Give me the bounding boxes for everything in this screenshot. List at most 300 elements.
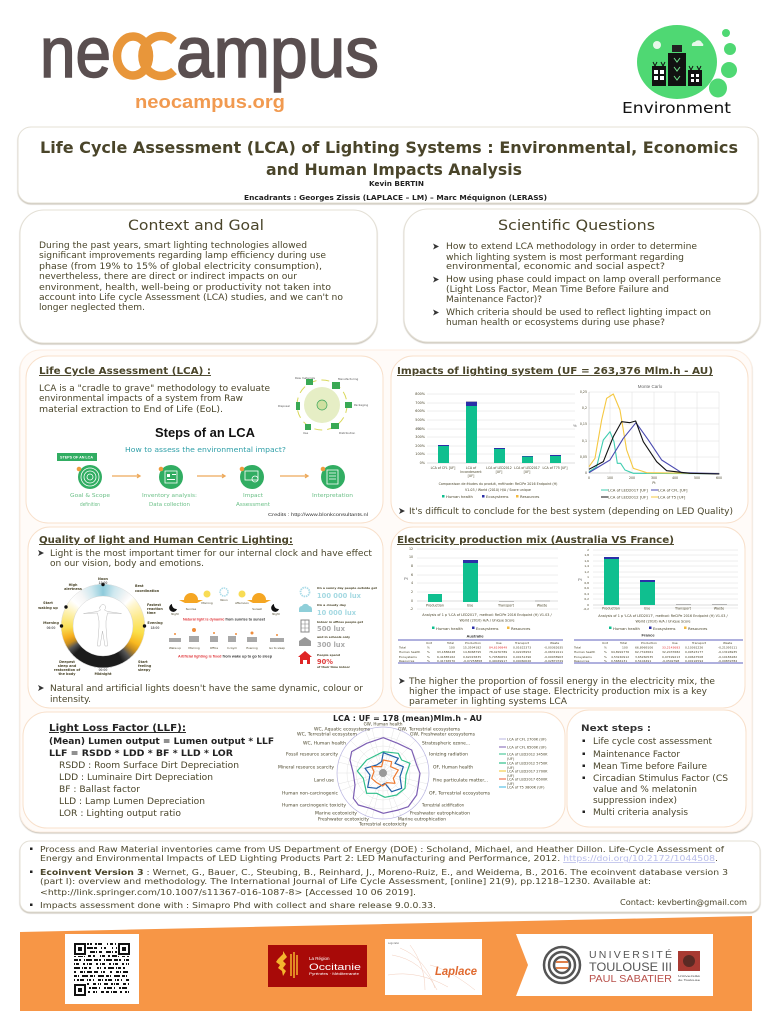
table: Australia: 0,40049917 [489,659,507,663]
diagram: circadian ring: 00:00 [99,668,107,672]
table: Australia: 15,3594182 [463,646,481,650]
table: Australia: -0,02870729 [544,659,563,663]
radar chart: Freshwater eutrophication [410,810,470,816]
definitions: RSDD : Room Surface Dirt Depreciation [59,761,239,771]
radar legend: LCA of LED2012 3450K [507,752,548,756]
logo: Laplace [385,939,482,995]
bar chart: France: Production [602,606,620,610]
tag: steps of an LCA: STEPS OF AN LCA [60,456,94,460]
table: Australia: % [427,646,430,650]
line chart: monte carlo: 0 [585,471,587,475]
radar chart: Human non-carcinogenic [282,790,338,796]
table: France: % [604,655,607,659]
diagram: lux levels: On a sunny day people outside get [317,586,378,590]
title: and Human Impacts Analysis [266,160,522,179]
diagram: lux levels: 10 000 lux [317,609,356,617]
definitions: BF : Ballast factor [59,785,140,795]
table: France: -0,0502398 [662,659,679,663]
line chart: monte carlo: 100 [607,476,613,480]
bar chart: lighting system comparison: 600% [415,409,426,413]
diagram: circadian ring: Fastest [147,603,161,607]
bar chart: Australia: -2 [410,607,413,611]
table: Australia: Australie [466,634,484,638]
text: questions: (Light Loss Factor, Mean Time Before Failure and [446,285,669,295]
radar legend: (UF) [507,757,515,761]
radar chart: Marine ecotoxicity [315,810,358,816]
logo: Laplace: Laplace [435,966,478,978]
text: questions: How using phase could impact on lamp overall performance [446,275,721,285]
references list: (part I): overview and methodology. The International Journal of Life Cycle Assessment, [online] 21(9), pp.1218–1230. Available at: [40,877,651,886]
table: France: -0,10186182 [718,655,737,659]
heading: electricity mix: Electricity production mix (Australia VS France) [397,535,674,546]
table: France: Production [641,641,657,645]
line chart: monte carlo: 200 [629,476,635,480]
bar chart: lighting system comparison: LCA of T75 [UF] [543,466,567,470]
radar chart: WC, Terrestrial ecosystem [297,732,357,736]
radar chart: WC, Aquatic ecosystems [314,726,370,732]
formulas: (Mean) Lumen output = Lumen output * LLF [49,737,274,747]
title panel [18,127,758,203]
bar chart: Australia: Transport [497,604,515,608]
radar chart: Fine particulate matter... [433,778,488,782]
table: Australia: 0,00060026 [513,659,531,663]
table: France: 0,00192594 [685,659,703,663]
bar chart: France: 0,4 [584,592,589,596]
radar legend: (UF) [507,766,515,770]
diagram: life cycle wheel: Disposal [278,404,290,408]
diagram: lux levels [298,586,378,669]
bar chart: lighting system comparison: Human health [446,494,474,499]
bar chart: France: 1,6 [584,559,589,563]
bar chart: lighting system comparison: 300% [415,435,426,439]
diagram: artificial light through the day: Wake up [169,646,181,650]
diagram: life cycle wheel [278,376,368,435]
diagram: artificial light through the day: In Gym [227,646,237,650]
text: context: nevertheless, there are direct or indirect impacts on our [39,272,297,282]
radar chart: Marine eutrophication [398,816,446,822]
list: next steps: Life cycle cost assessment [593,737,713,747]
table: France: -0,09839784 [718,659,737,663]
logo: Occitanie [268,945,367,987]
table: France: 3,65260535 [635,655,653,659]
radar legend: LCA of T5 3800K (UF) [507,786,545,790]
line chart: monte carlo: % [573,423,577,428]
table: France: 0,10361226 [685,646,703,650]
list: next steps: Multi criteria analysis [593,808,689,818]
list: next steps: Maintenance Factor [593,750,681,760]
table: Australia: Use [496,641,502,645]
diagram: circadian ring: Morning [43,621,59,625]
diagram: natural light through the day: Sunset [252,607,263,611]
list: next steps: suppression index) [593,796,677,806]
bar chart: Australia: 2 [411,590,413,594]
bar chart: lighting system comparison: [UF] [524,470,530,474]
bar chart: France: 1,8 [584,553,589,557]
table: France: % [604,650,607,654]
table: Australia: 6,41885162 [437,655,455,659]
text: fossil energy conclusion [399,677,715,707]
table: Australia: Unit [426,641,433,645]
diagram: circadian ring: time [147,611,156,615]
diagram: natural light through the day: Sunrise [186,607,196,611]
bar chart: lighting system comparison: 700% [415,401,426,405]
radar legend [499,738,548,790]
radar legend: LCA of LED2017 2700K [507,770,548,774]
table: France: Human health [574,650,595,654]
line chart: monte carlo: LCA of LED2017 [UF] [608,488,648,492]
line chart: monte carlo: LCA of LED2012 [UF] [608,494,648,500]
panel: light loss factor and radar [23,712,565,828]
table: France: 0,00647508 [685,655,703,659]
diagram: circadian ring: feeling [138,664,152,668]
radar chart: Stratospheric ozone... [422,740,470,746]
table: Australia: % [427,650,430,654]
title [40,138,738,179]
logo: neOCampus [40,14,379,112]
line chart: monte carlo: 0,05 [580,455,587,459]
bar chart: France: Waste [714,606,724,610]
panel: next steps [567,710,746,827]
diagram: lux levels: People spend [317,653,340,657]
diagram: natural light through the day: Night [171,612,180,616]
step 2: inventory analysis: Data collection [149,502,190,508]
diagram: natural light through the day: Night [272,612,281,616]
bar chart: France: 0 [587,603,589,607]
bar chart: France: Transport [674,606,692,610]
radar chart: WC, Human health [303,740,346,746]
diagram: natural light through the day: Natural light is dynamic from sunrise to sunset [183,618,266,622]
bar chart: Australia: 6 [411,573,413,577]
table: Australia: -0,00362635 [544,646,563,650]
references list: Impacts assessment done with : Simapro Phd with collect and share release 9.0.0.33. [40,901,436,910]
table: Australia: Human health [399,650,420,654]
table: Australia: 78,4230789 [489,650,507,654]
bar chart: lighting system comparison [415,392,575,499]
diagram: natural light through the day: Afternoon [235,601,249,605]
step 3: impact assessment: Assessment [236,502,270,508]
bar chart: France: Human health [613,626,641,631]
banner: partner logos [20,916,752,1011]
text: LCA definition: LCA is a "cradle to grave" methodology to evaluate [39,384,270,394]
diagram: lux levels: of their time indoor [317,665,351,669]
definitions [59,761,239,819]
heading: next steps: Next steps : [581,724,651,734]
table: Australia: Total [398,646,406,650]
line chart: monte carlo: 0,25 [580,390,587,394]
panel: quality of light [28,527,383,708]
text: questions: environmental, economic and social aspect? [446,262,665,272]
bar chart: Australia: Resources [511,626,530,631]
table: Australia: -0,00038903 [544,655,563,659]
panel: results background [20,350,752,832]
logo: neOCampus: ne [40,14,111,93]
text: fossil energy conclusion: The higher the proportion of fossil energy in the electricity mix, the [408,677,715,687]
bar chart: Australia: 8 [411,564,413,568]
diagram: life cycle wheel: Manufacturing [338,377,358,381]
arrow [112,474,140,478]
diagram: lux levels: and in schools only [317,635,350,639]
text: LCA definition [39,384,270,415]
icon: environment badge [622,25,737,117]
text: conclusion on best system: It's difficult to conclude for the best system (depending on LED Quality) [409,507,733,517]
text: context: environment, health, well-being or productivity not taken into [39,283,331,293]
bar chart: France: 0,6 [584,586,589,590]
bar chart: lighting system comparison: 100% [415,452,426,456]
logo: neOCampus: neocampus.org [135,92,285,112]
diagram: circadian ring: Start [138,660,148,664]
diagram: artificial light through the day: Office [210,646,218,650]
logo: Laplace: Logo labo [388,942,400,945]
logo: Université Toulouse III: UNIVERSITÉ [589,948,672,961]
text: questions [433,242,721,328]
diagram: circadian ring: restoration of [54,668,81,672]
radar chart: OF, Human health [433,764,473,770]
table: France: 33,2143683 [662,646,680,650]
tag: steps of an LCA [57,453,97,461]
bar chart: France: 1,4 [584,564,589,568]
radar chart [278,722,548,826]
diagram: circadian ring: Best [135,584,144,588]
bar chart: lighting system comparison: Ecosystems [486,494,509,499]
list: next steps [582,737,728,818]
table: France: Total [619,641,627,645]
line chart: monte carlo: 500 [694,476,700,480]
table: France: % [604,659,607,663]
author: Kevin BERTIN [369,180,424,188]
contact: Contact: kevbertin@gmail.com [620,898,747,907]
text: LCA definition: environmental impacts of a system from Raw [39,394,243,404]
diagram: circadian ring: the body [59,672,76,676]
table: France: 66,8969106 [635,646,653,650]
list: next steps: Mean Time before Failure [593,762,707,772]
table: France: 0,97499213 [662,655,680,659]
references list: <http://link.springer.com/10.1007/s11367-016-1087-8> [Accessed 10 06 2019]. [40,888,416,897]
table: Australia: -0,07258858 [463,659,482,663]
diagram: circadian ring: reaction [147,607,163,611]
radar chart: GW, Freshwater ecosystems [410,732,475,736]
icon: human figure [84,604,122,646]
heading: quality of light: Quality of light and Human Centric Lighting: [39,535,293,546]
line chart: monte carlo: Monte Carlo [638,384,663,389]
logo: Université Toulouse III: TOULOUSE III [589,960,672,974]
table: France: Resources [574,659,590,663]
table: France: % [604,646,607,650]
table: Australia: Ecosystems [399,655,417,659]
arrow [280,474,308,478]
heading: impacts: Impacts of lighting system (UF = 263,376 Mlm.h - AU) [397,366,713,377]
references list: Energy and Environmental Impacts of LED Lighting Products Part 2: LED Manufacturing and Performance, 2012. https://doi.org/10.2172/1044508 . [40,854,718,863]
bar chart: France: -0,2 [583,607,589,611]
diagram: natural light through the day: Noon [220,598,228,602]
bar chart: France: 2 [587,548,589,552]
logo: Université Toulouse III [516,934,713,996]
table: Australia: Transport [514,641,530,645]
table: France: 0,5684131 [611,659,627,663]
table: Australia: 0,62015835 [463,655,481,659]
heading: radar chart: LCA : UF = 178 (mean)Mlm.h - AU [333,714,482,723]
credits: Credits : http://www.blonkconsultants.nl [268,512,368,517]
table: France: -0,21395111 [718,646,737,650]
text: questions: Which criteria should be used to reflect lighting impact on [446,308,711,318]
definitions: LDD : Luminaire Dirt Depreciation [59,773,213,783]
bar chart: Australia: Analysis of 1 p 'LCA of LED2017', method: ReCiPe 2016 Endpoint (H) V1.03 / [422,613,553,617]
radar chart: Mineral resource scarcity [278,764,335,770]
radar chart: Terrestrial ecotoxicity [358,822,408,826]
table: France: 94,8991776 [611,650,629,654]
line chart: monte carlo: LCA of T5 [UF] [658,494,686,500]
diagram: life cycle wheel: Packaging [354,403,368,407]
list: next steps: value and % melatonin [593,785,697,795]
heading: LCA: Life Cycle Assessment (LCA) : [39,366,211,377]
panel: references [20,841,760,912]
panel: life cycle assessment [26,356,383,523]
bar chart: Australia: Pt [404,576,409,581]
diagram: lux levels: 500 lux [317,625,345,633]
diagram: circadian ring: sleepy [138,668,151,672]
line chart: monte carlo: 0,15 [580,422,587,426]
radar legend: (UF) [507,782,515,786]
table: Australia: 0,02205952 [513,650,531,654]
bar chart: France: World (2010) H/A / Unique Score [636,620,690,624]
diagram: artificial light through the day [169,628,285,658]
bar chart: lighting system comparison: 400% [415,427,426,431]
diagram: circadian ring: Deepest [59,660,75,664]
table: Australia: 5,79580654 [489,655,507,659]
diagram: lux levels: 300 lux [317,641,345,649]
bar chart: Australia: Waste [537,604,547,608]
table: Australia: Total [446,641,454,645]
table: France: 62,7316561 [635,650,653,654]
panel: impacts of lighting system [391,356,748,523]
definitions: LOR : Lighting output ratio [59,809,181,819]
diagram: lux levels: Indoor in offices people get [317,620,364,624]
references list: Process and Raw Material inventories came from US Department of Energy (DOE) : Scholand, Michael, and Heather Dillon. Life-Cycle Assessment of [40,845,724,854]
logo: Occitanie: Pyrénées · Méditerranée [309,972,359,976]
bar chart: lighting system comparison: LCA of LED2012 [486,466,512,470]
diagram: circadian ring: 18:00 [151,626,159,630]
diagram: lux levels: On a cloudy day [317,603,346,607]
diagram: life cycle wheel: Use [303,431,309,435]
radar chart: Freshwater ecotoxicity [318,816,370,822]
heading: steps of an LCA: Steps of an LCA [155,425,256,440]
logo: neOCampus: ampus [176,14,379,93]
text: context: account into Life cycle Assessment (LCA) studies, and we can't no [39,293,343,303]
radar chart: GW, Terrestrial ecosystems [398,726,460,732]
arrow [197,474,225,478]
line chart: monte carlo [573,384,722,500]
table: France: Use [672,641,678,645]
text: context: During the past years, smart lighting technologies allowed [39,241,307,251]
bar chart: France: Pt [578,577,583,582]
bar chart: France: 0,8 [584,581,589,585]
table: France: 32,2037682 [662,650,680,654]
diagram: lux levels: 90% [317,658,333,666]
radar chart: GW, Human health [364,722,403,726]
table: Australia: 84,6199849 [489,646,507,650]
panel: electricity production mix [391,527,745,708]
bar chart: lighting system comparison: LCA of [466,466,477,470]
diagram: circadian ring: 06:00 [47,626,55,630]
table: Australia: 0,00151396 [513,655,531,659]
table: France: Ecosystems [574,655,592,659]
text: light as timer [38,549,372,569]
heading: scientific questions: Scientific Questions [498,218,655,234]
line chart: monte carlo: 0 [588,476,590,480]
diagram: circadian ring: Start [43,601,53,605]
logo: Université Toulouse III: PAUL SABATIER [589,974,672,985]
heading: context and goal: Context and Goal [128,218,264,234]
diagram: artificial light through the day: Evening [246,646,258,650]
heading: light loss factor: Light Loss Factor (LLF): [49,723,186,734]
bar chart: Australia: Ecosystems [476,626,499,631]
bar chart: France: 1 [587,575,589,579]
line chart: monte carlo: 0,2 [582,406,587,410]
bar chart: lighting system comparison: 500% [415,418,426,422]
bar chart: lighting system comparison: 200% [415,444,426,448]
radar chart: Human carcinogenic toxicity [282,802,347,808]
diagram: life cycle wheel: Distribution [339,431,356,435]
definitions: LLD : Lamp Lumen Depreciation [59,797,205,807]
table: France: France [641,632,655,638]
radar legend: LCA of LED2012 5750K [507,762,548,766]
text: light as timer: on our vision, body and emotions. [50,559,204,569]
list: next steps: Circadian Stimulus Factor (CS [593,774,728,784]
diagram: circadian ring: waking up [38,606,58,610]
line chart: monte carlo: 600 [716,476,722,480]
step 2: inventory analysis [142,465,197,508]
table: France: Total [573,646,581,650]
step 3: impact assessment [236,465,270,508]
diagram: artificial light through the day: Morning [188,646,200,650]
bar chart: lighting system comparison: 0% [420,461,426,465]
diagram: circadian ring: sleep and [58,664,77,668]
table: France: -0,13196935 [718,650,737,654]
table: Australia: 93,1886248 [437,650,455,654]
diagram: circadian ring: 12:00 [99,581,107,585]
diagram: circadian ring: Evening [147,621,163,625]
diagram: life cycle wheel: Raw materials [295,376,315,380]
text: fossil energy conclusion: parameter in lighting systems LCA [409,697,568,707]
table: France: 0,09523177 [685,650,703,654]
text: questions: which lighting system is most performant regarding [446,253,684,263]
table: Australia: Resources [399,659,415,663]
diagram: circadian ring: High [69,583,78,587]
text: natural and artificial lights: intensity. [50,695,91,705]
diagram: circadian ring: alertness [64,587,82,591]
bar chart: Australia: 0 [411,599,413,603]
table: Australia: Production [465,641,481,645]
diagram: circadian ring: Midnight [94,672,112,676]
logo: Université Toulouse III: Université [678,974,701,978]
logo: Université Toulouse III: de Toulouse [678,978,700,982]
text: context: longer neglected them. [39,303,145,313]
diagram: artificial light through the day: Artificial lighting is fixed from wake up to go to sleep [178,654,272,658]
bar chart: lighting system comparison: LCA of CFL [UF] [431,466,455,470]
bar chart: Australia [404,547,558,631]
text: questions: human health or ecosystems during use phase? [446,318,665,328]
radar chart: Fossil resource scarcity [286,752,339,756]
radar legend: (UF) [507,774,515,778]
table: Australia: -0,06319111 [544,650,563,654]
table: France: 0,5104491 [635,659,651,663]
bar chart: lighting system comparison: Comparaison de études du produit, méthode: ReCiPe 2016 Endpoint (H) [439,482,557,486]
text: context: phase (from 19% to 15% of global electricity consumption), [39,262,322,272]
bar chart: France: 1,2 [584,570,589,574]
table: Australia: Waste [550,641,559,645]
bar chart: lighting system comparison: LCA of LED2017 [514,466,540,470]
bar chart: France: Use [644,606,650,610]
bar chart: France: Ecosystems [653,626,676,631]
